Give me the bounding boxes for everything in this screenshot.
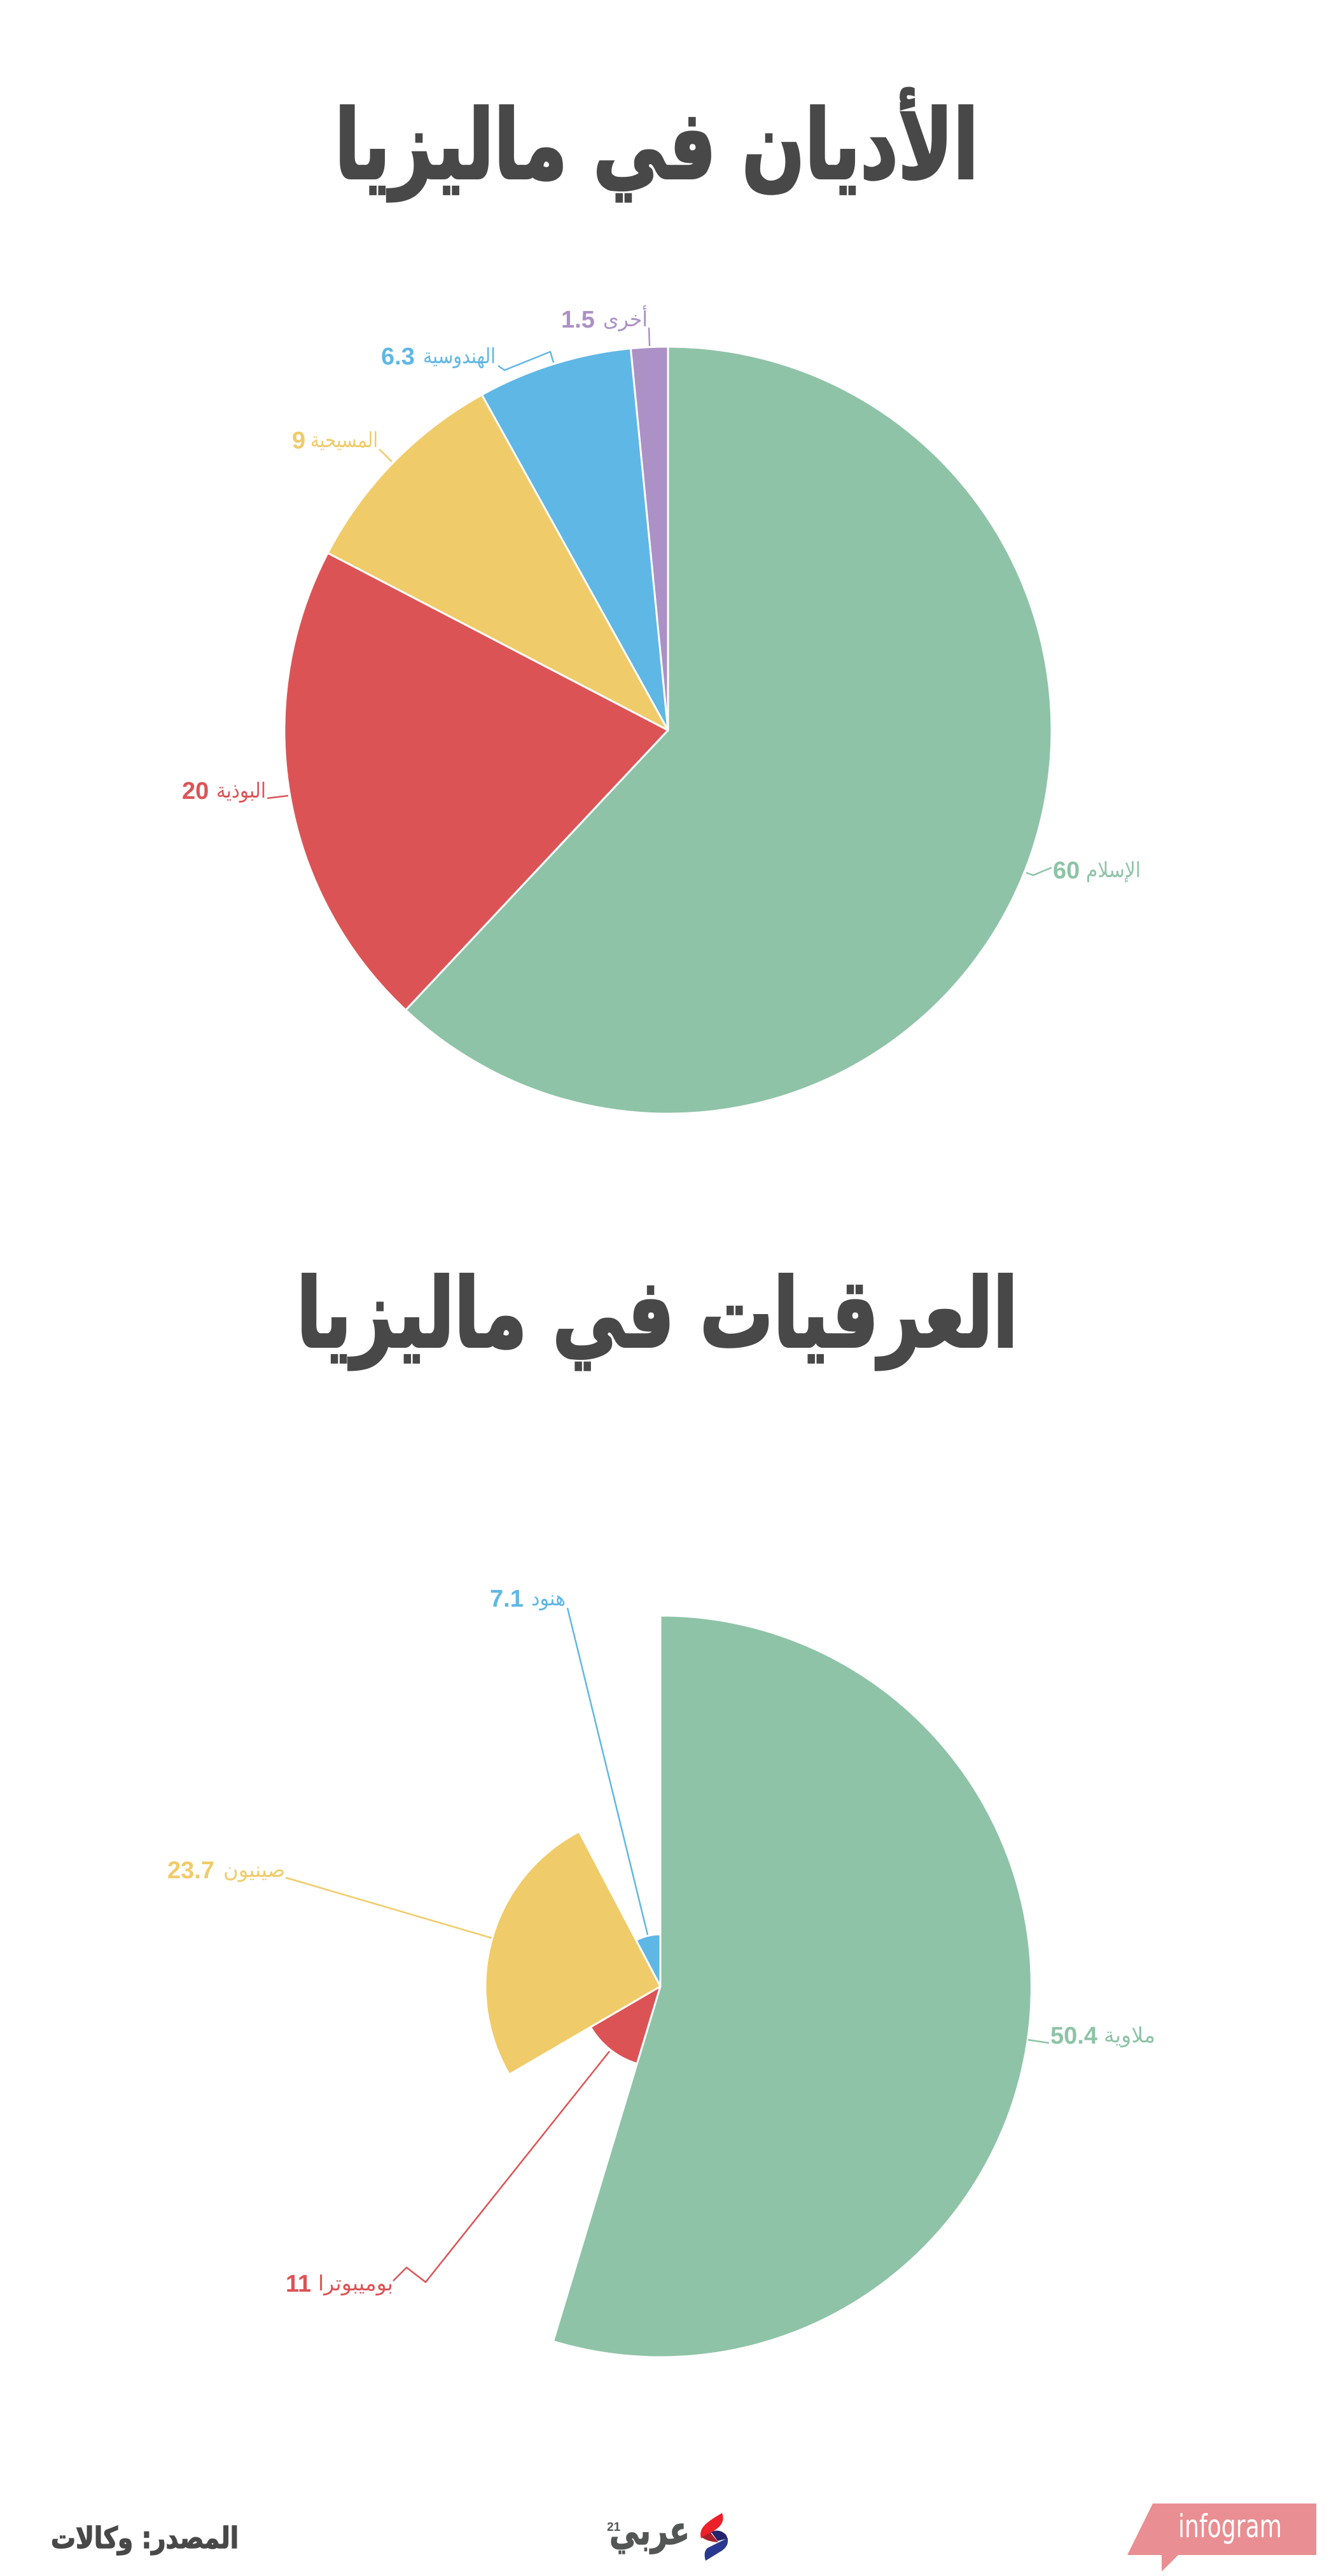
slice: Hinduism 6.3 <box>482 349 668 730</box>
label: other 1.5: أخرى <box>603 305 648 331</box>
slice: Indian 7.1 <box>636 1934 660 1986</box>
slice: other 1.5 <box>630 347 668 730</box>
title: religions: الأديان في ماليزيا <box>335 88 978 202</box>
logo superscript 21: 21 <box>607 2521 621 2534</box>
label: Christianity 9: 9 <box>292 427 305 454</box>
label: Hinduism 6.3: الهندوسية <box>423 343 496 368</box>
slice: Malay 50.4 <box>553 1616 1031 2357</box>
pie chart: ethnicities <box>485 1616 1031 2357</box>
slice: Islam 60 <box>406 347 1052 1114</box>
slice: Buddhism 20 <box>284 553 668 1010</box>
logo wordmark: عربي <box>609 2507 690 2554</box>
label: Chinese 23.7 <box>167 1857 492 1938</box>
label: Bumiputera 11: 11 <box>286 2271 311 2297</box>
logo icon: blue ribbon <box>705 2538 728 2561</box>
label: Buddhism 20: 20 <box>182 778 209 805</box>
label: Chinese 23.7: 23.7 <box>167 1857 214 1884</box>
label: Christianity 9 <box>292 427 392 462</box>
label: Islam 60 <box>1026 857 1141 884</box>
label: Bumiputera 11 <box>286 2051 609 2297</box>
label: Buddhism 20 <box>182 778 288 805</box>
label: Hinduism 6.3 <box>381 343 553 370</box>
logo icon: dark red fold <box>702 2533 718 2542</box>
label: Malay 50.4: ملاوية <box>1104 2023 1155 2047</box>
label: Malay 50.4: 50.4 <box>1050 2023 1097 2049</box>
logo: Arabi21 <box>607 2507 728 2561</box>
logo icon: red ribbon <box>700 2513 723 2538</box>
label: other 1.5: 1.5 <box>561 307 595 333</box>
slice: Bumiputera 11 <box>590 1986 660 2064</box>
logo icon: navy fold <box>711 2531 727 2541</box>
label: Bumiputera 11: بوميبوترا <box>318 2271 393 2296</box>
badge shape <box>1127 2503 1316 2572</box>
label: Islam 60: الإسلام <box>1086 857 1141 882</box>
label: Malay 50.4 <box>1028 2023 1155 2049</box>
label: other 1.5 <box>561 305 650 346</box>
label: Indian 7.1 <box>490 1586 648 1935</box>
label: Indian 7.1: هنود <box>531 1586 566 1610</box>
label: Chinese 23.7: صينيون <box>223 1857 285 1882</box>
title: ethnicities: العرقيات في ماليزيا <box>296 1259 1018 1370</box>
label: Islam 60: 60 <box>1053 857 1080 884</box>
badge wordmark: infogram <box>1178 2508 1282 2545</box>
source text: المصدر: وكالات <box>51 2521 239 2555</box>
pie chart: religions <box>284 347 1052 1114</box>
label: Buddhism 20: البوذية <box>216 778 266 803</box>
infogram badge <box>1127 2503 1316 2572</box>
slice: Christianity 9 <box>328 395 668 730</box>
slice: Chinese 23.7 <box>485 1832 660 2075</box>
label: Hinduism 6.3: 6.3 <box>381 343 415 370</box>
label: Christianity 9: المسيحية <box>310 427 378 452</box>
label: Indian 7.1: 7.1 <box>490 1586 524 1612</box>
